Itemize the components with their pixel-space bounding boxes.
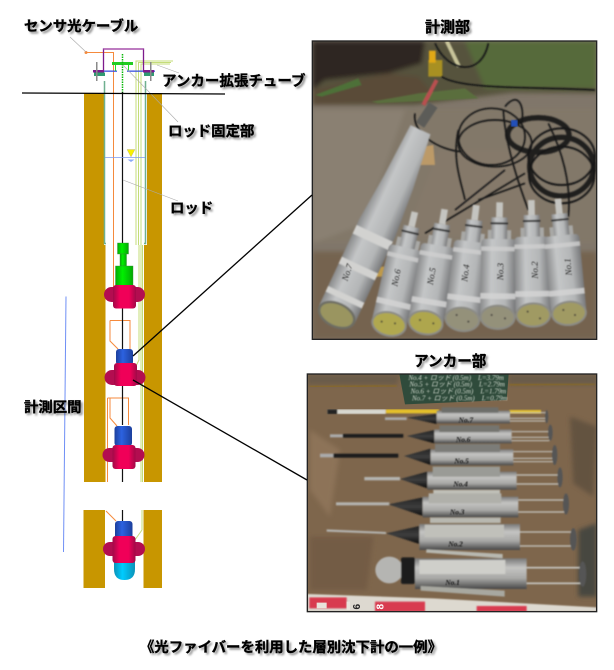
- blackboard: No.4 + ロッド (0.5m) L=3.79m: [407, 374, 504, 382]
- handwritten numbers: No.6: [389, 268, 403, 288]
- six sensor units: [369, 197, 588, 340]
- anchor numbers: No.7: [458, 416, 473, 425]
- label: anchor expansion tube: アンカー拡張チューブ: [162, 74, 306, 90]
- water level: [105, 150, 145, 162]
- handwritten numbers: No.3: [495, 262, 505, 281]
- anchor numbers: No.1: [444, 578, 460, 587]
- green top anchor: [116, 243, 133, 286]
- heading: anchor units: アンカー部: [414, 354, 486, 370]
- sensor 2: [102, 426, 144, 469]
- blackboard: No.6 + ロッド (0.5m) L=1.79m: [410, 388, 506, 396]
- diagram: borehole cross-section: [64, 37, 179, 588]
- bottom sensor: [103, 521, 145, 580]
- sensor head housing: [104, 49, 144, 71]
- anchor No.5: [320, 444, 557, 465]
- connector line to measurement photo: [133, 195, 312, 356]
- flange and bolts: [93, 62, 155, 81]
- label: rod fixing part: ロッド固定部: [168, 124, 254, 140]
- anchor numbers: [444, 416, 473, 587]
- heading: measurement units: 計測部: [425, 19, 470, 36]
- anchor numbers: No.5: [453, 457, 469, 466]
- photo: measurement units: [312, 41, 597, 340]
- sensor 1: [104, 349, 146, 386]
- handwritten numbers: No.2: [530, 261, 540, 280]
- ground line: [22, 93, 225, 94]
- rod: [122, 92, 124, 522]
- anchor No.4: [364, 467, 563, 490]
- anchors No.1-7: [320, 407, 586, 597]
- anchor numbers: No.2: [447, 540, 463, 549]
- long sensor No.7: [313, 122, 441, 335]
- measuring staff: [327, 409, 541, 414]
- anchor No.7: [385, 407, 548, 424]
- anchor No.3: [336, 490, 569, 523]
- blackboard: [399, 374, 509, 404]
- label: sensor fiber cable: センサ光ケーブル: [24, 19, 138, 35]
- anchor 1: [104, 285, 145, 308]
- tape measure: 8: [375, 603, 386, 609]
- anchor numbers: No.6: [455, 435, 471, 444]
- connector line to anchor photo: [133, 380, 307, 480]
- handwritten numbers: No.1: [562, 258, 574, 277]
- handwritten numbers: No.7: [339, 262, 355, 283]
- anchor numbers: No.3: [449, 507, 465, 516]
- caption: 《光ファイバーを利用した層別沈下計の一例》: [140, 640, 442, 656]
- anchor No.2: [327, 524, 577, 558]
- gold borehole walls: [84, 93, 162, 588]
- handwritten numbers: No.5: [425, 266, 438, 286]
- rod fixing part: [112, 54, 133, 93]
- tape measure: [307, 594, 597, 612]
- anchor No.6: [330, 425, 553, 443]
- anchor numbers: No.4: [452, 479, 468, 488]
- anchor expansion tubes: [132, 61, 173, 544]
- cable coils: [415, 43, 595, 233]
- handwritten numbers: No.4: [459, 263, 471, 283]
- photo: anchor units: [307, 374, 597, 612]
- sensor fiber cable: [85, 52, 130, 521]
- blackboard: No.5 + ロッド (0.5m) L=2.79m: [408, 381, 505, 389]
- measurement section arrow: [64, 296, 66, 552]
- label: measurement section: 計測区間: [24, 400, 82, 416]
- leader lines: [70, 37, 179, 201]
- anchor No.1: [375, 557, 586, 597]
- tape measure: 6: [352, 603, 363, 609]
- blackboard: No.7 + ロッド (0.5m) L=0.79m: [411, 394, 508, 402]
- casing pipe: [104, 81, 146, 244]
- label: rod: ロッド: [170, 201, 213, 217]
- handwritten numbers: [339, 258, 574, 288]
